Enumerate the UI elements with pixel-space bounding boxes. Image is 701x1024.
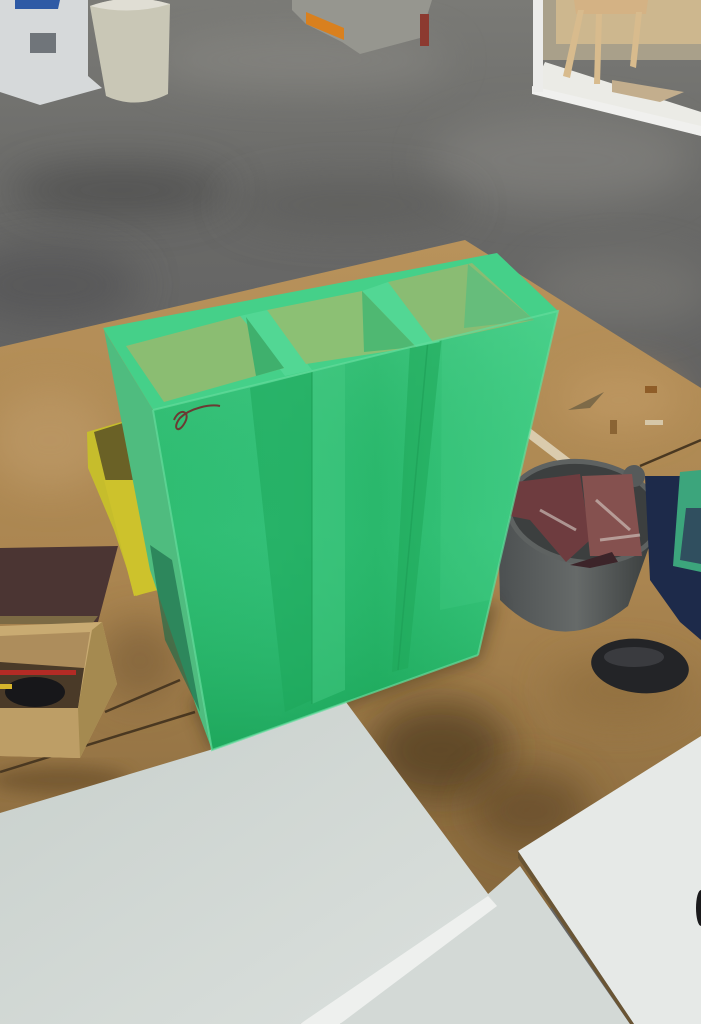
compartment openings: [126, 263, 534, 402]
wooden tool box: [0, 622, 117, 758]
rim of box: [103, 253, 558, 410]
green acrylic box: [103, 253, 558, 750]
sanding block: [0, 546, 118, 624]
marker scribble: [174, 406, 220, 429]
floor: [0, 0, 701, 400]
workbench: [0, 240, 701, 920]
front face: [153, 311, 558, 750]
front face internal partitions: [250, 372, 312, 712]
box shadow on table: [190, 600, 498, 752]
machine, top left: [0, 0, 102, 105]
shelf with wooden stool, top right: [532, 0, 701, 136]
yellow box behind green box: [87, 420, 158, 596]
metal bucket: [498, 452, 666, 632]
white paper sheets, bottom: [0, 694, 701, 1024]
waste bin: [90, 0, 170, 103]
sandpaper scraps in bucket: [510, 474, 642, 568]
computer mouse: [588, 634, 692, 698]
rim dividers: [240, 310, 312, 376]
cabinet on floor, top centre: [292, 0, 432, 54]
navy bag and green sheet, right edge: [645, 470, 701, 640]
left side panel: [104, 330, 212, 750]
edge highlights: [153, 311, 558, 750]
panel seams: [312, 340, 428, 704]
